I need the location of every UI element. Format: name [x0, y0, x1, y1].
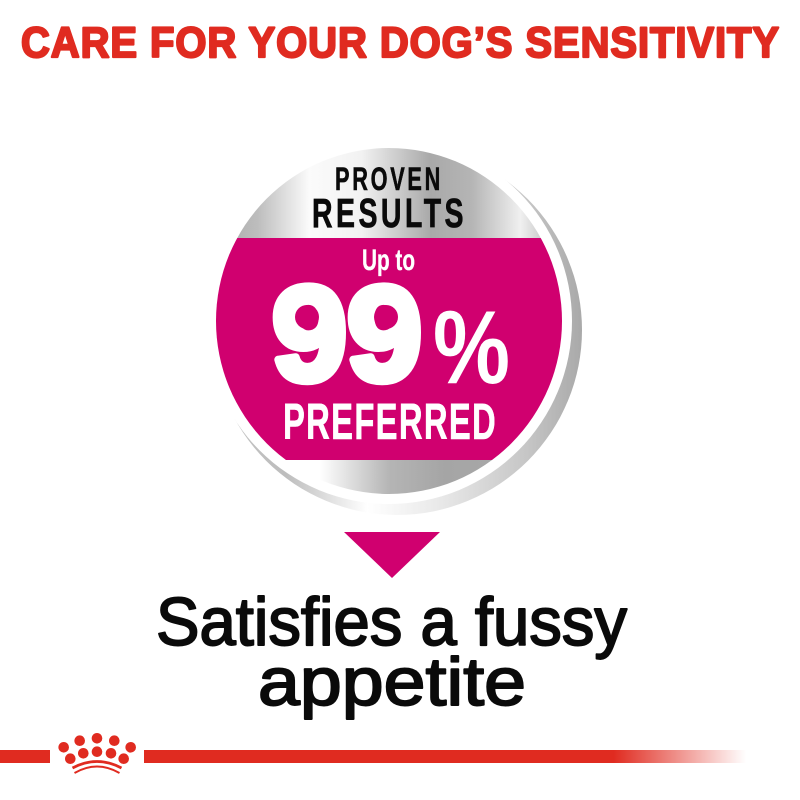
badge heading: PROVEN	[335, 161, 443, 197]
footer rule left	[0, 750, 50, 763]
outer silver crescent	[212, 145, 582, 515]
99 percent	[272, 260, 510, 409]
footer rule right	[144, 750, 746, 763]
caption: Satisfies a fussy	[156, 584, 627, 660]
silver disc	[216, 148, 562, 496]
badge heading	[312, 161, 467, 236]
up to: Up to	[362, 244, 415, 277]
preferred: PREFERRED	[283, 393, 497, 450]
arrow	[344, 532, 440, 578]
icon: crown	[58, 733, 136, 773]
caption: appetite	[258, 644, 526, 720]
badge: proven results	[206, 138, 582, 515]
caption	[156, 584, 627, 720]
badge heading: RESULTS	[312, 190, 467, 236]
99 percent: 99	[272, 260, 422, 409]
99 percent: %	[433, 290, 510, 406]
